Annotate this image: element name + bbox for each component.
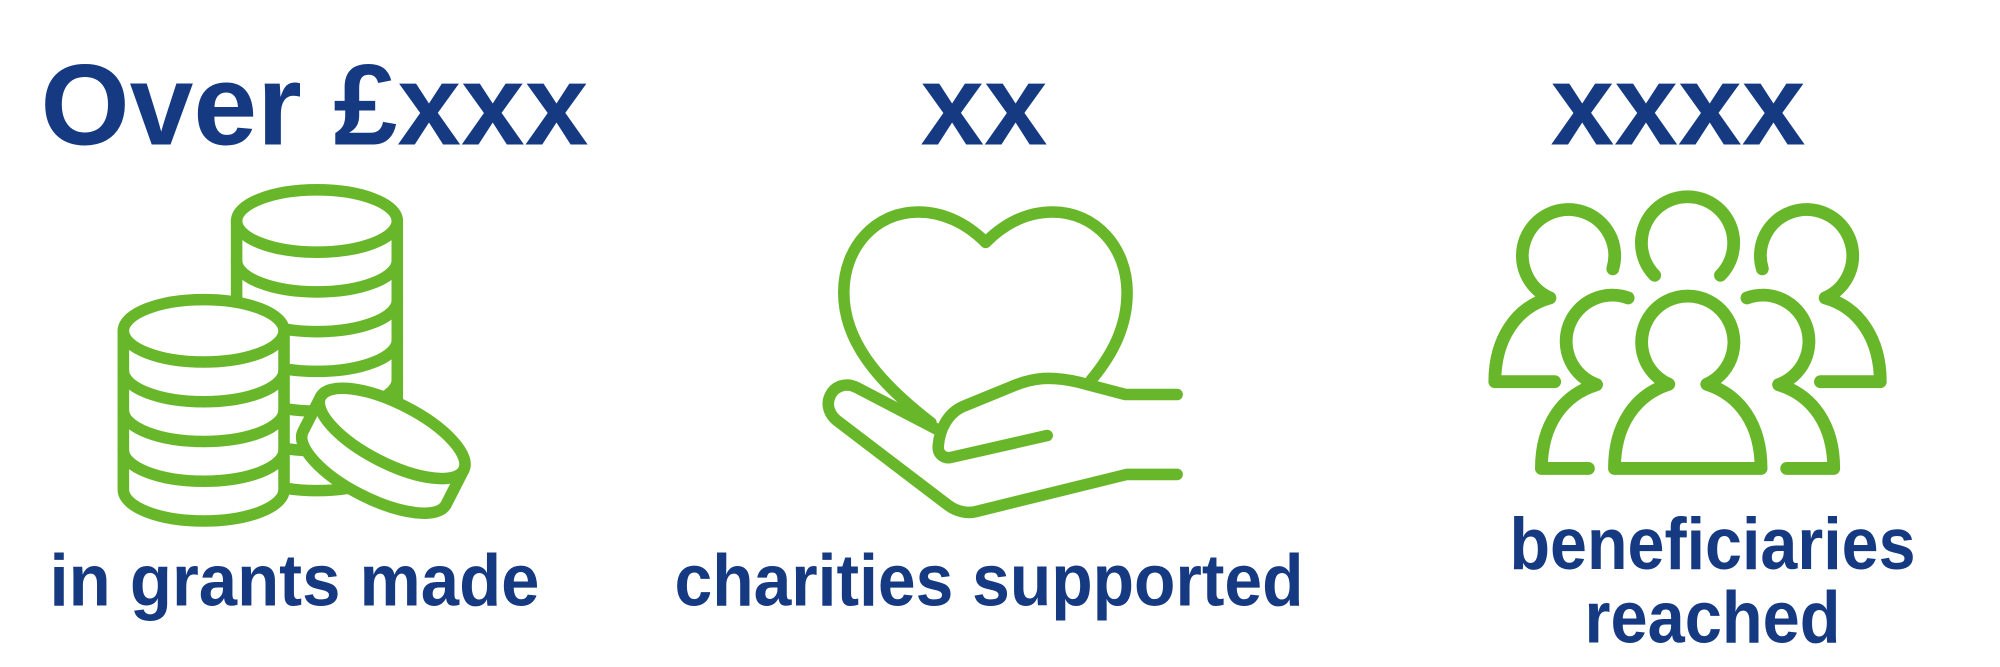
label: beneficiaries: beneficiaries	[1510, 504, 1916, 585]
panel: charities	[674, 42, 1304, 622]
person: back right	[1760, 210, 1880, 382]
icon: coins	[123, 190, 477, 531]
hand lower palm	[828, 385, 1177, 512]
heart outline	[844, 212, 1127, 423]
back coin stack	[237, 190, 397, 491]
person: front right	[1747, 295, 1834, 468]
label: reached: reached	[1584, 578, 1840, 658]
front coin stack	[123, 300, 284, 521]
panel: grants	[40, 42, 589, 622]
icon: hand holding heart	[828, 212, 1177, 512]
person: front centre	[1614, 296, 1761, 468]
person: back centre	[1641, 197, 1734, 275]
tilted coin	[289, 370, 477, 531]
panel: beneficiaries	[1495, 42, 1916, 658]
icon: group of people	[1495, 197, 1880, 468]
label: in grants made: in grants made	[50, 540, 540, 622]
hand upper line and thumb	[938, 378, 1177, 458]
person: front left	[1541, 295, 1628, 468]
heading: over £xxx: Over £xxx	[40, 42, 589, 170]
heading: xx: xx	[920, 42, 1048, 170]
person: back left	[1495, 210, 1615, 382]
heading: xxxx: xxxx	[1550, 42, 1806, 170]
label: charities supported: charities supported	[674, 540, 1304, 622]
